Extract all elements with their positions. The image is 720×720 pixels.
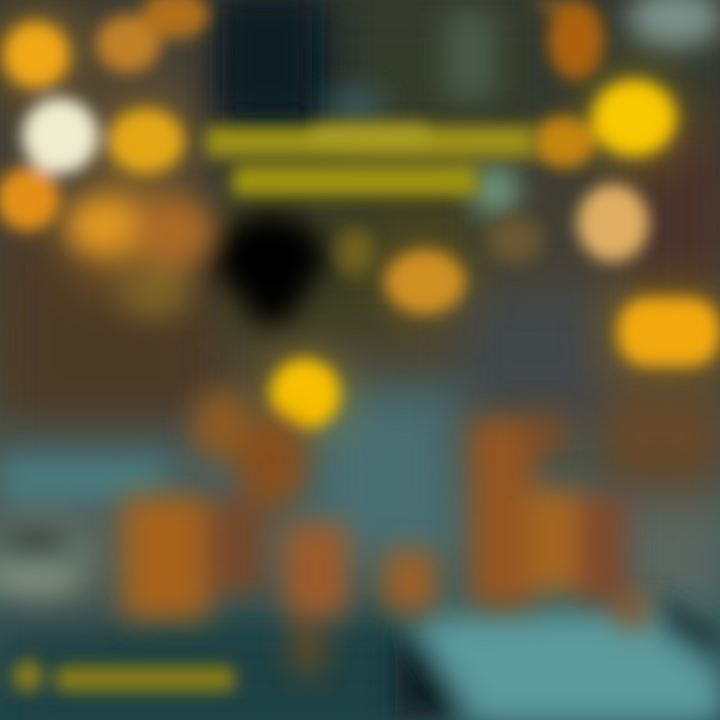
dark shape: upper column [222, 0, 312, 115]
dark shape: central silhouette [216, 214, 324, 325]
bokeh lights: centre and right [335, 216, 720, 366]
bokeh lights: top left cluster [0, 0, 209, 231]
heading: blurred yellow title bars [205, 122, 535, 196]
pale green-grey top accents [325, 0, 720, 216]
bokeh lights: top right cluster [532, 0, 676, 262]
bokeh lights: left mid glow [66, 196, 214, 318]
bokeh light: central yellow [270, 359, 340, 429]
panel: lower right teal surface [395, 590, 720, 720]
glow behind lights [0, 15, 720, 436]
gold stacks: left group [122, 389, 437, 678]
panel: left teal surface [0, 458, 165, 597]
footer: blurred yellow label [12, 660, 235, 692]
gold stacks: right group [470, 405, 710, 630]
